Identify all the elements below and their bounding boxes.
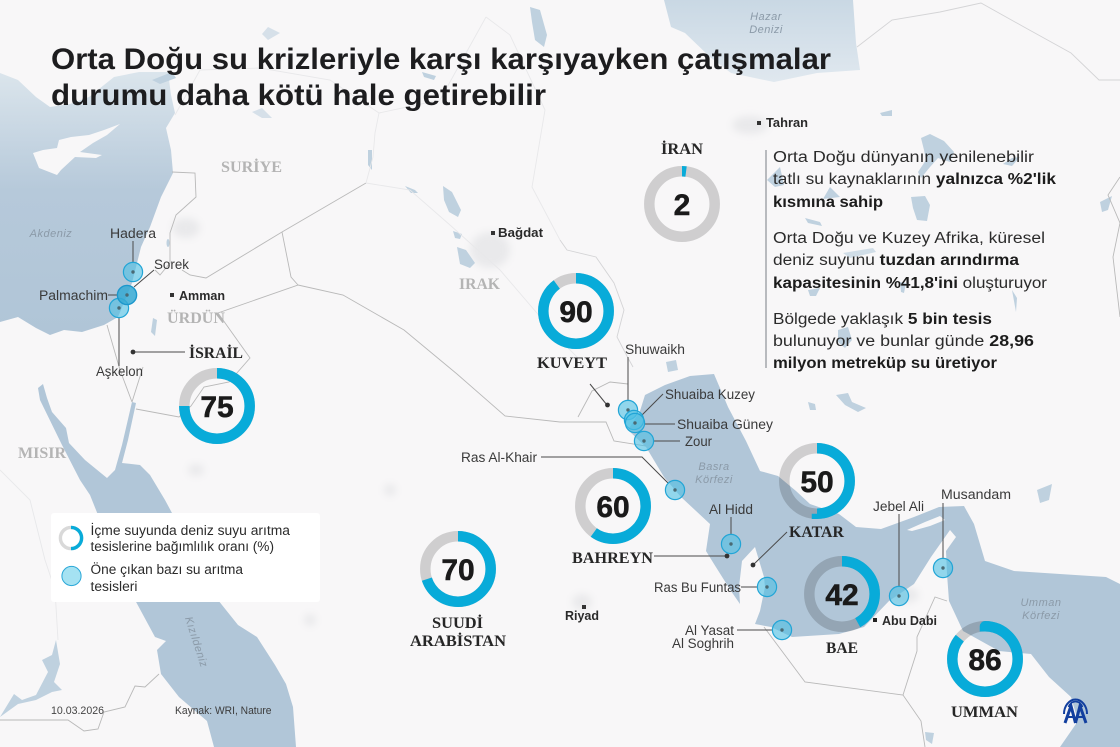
map labels: water bodies: Kızıldeniz — [182, 615, 210, 669]
map labels: countries in grey: SURİYE — [221, 159, 282, 176]
date: 10.03.2026 — [51, 705, 104, 717]
desalination plants: Israel — [39, 226, 189, 379]
text block: key facts: milyon metreküp su üretiyor — [773, 355, 997, 372]
map labels: countries in grey: ÜRDÜN — [167, 310, 225, 327]
desalination plants: Israel: Palmachim — [39, 288, 108, 303]
map labels: water bodies: Akdeniz — [29, 228, 72, 240]
desalination plants: Gulf: Shuwaikh — [625, 342, 685, 357]
map labels: water bodies: Hazar — [750, 11, 783, 23]
desalination plants: Gulf: Al Hidd — [709, 502, 753, 517]
donut: Umman 86: 86 — [968, 644, 1002, 677]
text block: key facts: deniz suyunu tuzdan arındırma — [773, 252, 1019, 269]
icon: AA logo — [1064, 700, 1087, 723]
map labels: countries in grey: IRAK — [459, 276, 500, 293]
desalination plants: Gulf: Shuaiba Kuzey — [665, 387, 755, 402]
legend — [51, 513, 320, 602]
donut: İran 2 — [649, 141, 715, 237]
donut: Bahreyn 60: 60 — [596, 491, 630, 524]
map labels: countries in grey — [18, 159, 500, 462]
country leader lines — [131, 350, 787, 567]
legend: İçme suyunda deniz suyu arıtma — [90, 523, 290, 538]
desalination plants: Gulf: Musandam — [941, 487, 1011, 502]
text block: key facts: Orta Doğu dünyanın yenilenebilir — [773, 149, 1034, 166]
donut: İsrail 75: 75 — [200, 391, 234, 424]
map labels: water bodies: Umman — [1020, 597, 1062, 609]
desalination plants: Gulf: Ras Bu Funtas — [654, 580, 741, 595]
desalination plants: Israel: Aşkelon — [96, 364, 143, 379]
map labels: water bodies: Denizi — [749, 24, 783, 36]
donut: İran 2: İRAN — [661, 141, 703, 158]
text block: key facts: tatlı su kaynaklarının yalnızca %2'lik — [773, 171, 1056, 188]
donut: Suudi Arabistan 70 — [410, 536, 506, 650]
donut: Katar 50: 50 — [800, 466, 834, 499]
desalination plants: Gulf: Al Soghrih — [672, 636, 734, 651]
capital cities: Tahran — [766, 116, 808, 130]
text block: key facts: kapasitesinin %41,8'ini oluşturuyor — [773, 275, 1047, 292]
donut: Katar 50 — [784, 448, 850, 541]
donut: Bahreyn 60 — [572, 473, 653, 567]
donut: Kuveyt 90: 90 — [559, 296, 593, 329]
donut: İsrail 75: İSRAİL — [189, 345, 243, 362]
donut: Suudi Arabistan 70: 70 — [441, 554, 475, 587]
capital cities: Riyad — [565, 609, 599, 623]
donut: Umman 86: UMMAN — [951, 704, 1018, 721]
desalination plants: Gulf: Ras Al-Khair — [461, 450, 538, 465]
desalination plants: Gulf: Zour — [685, 434, 712, 449]
donut: Kuveyt 90 — [537, 278, 609, 372]
text block: key facts — [766, 149, 1056, 372]
desalination plants: Gulf — [461, 342, 1011, 651]
text block: key facts: Bölgede yaklaşık 5 bin tesis — [773, 311, 992, 328]
map labels: water bodies: Körfezi — [695, 474, 733, 486]
legend: tesisleri — [90, 579, 138, 594]
title: durumu daha kötü hale getirebilir — [51, 79, 546, 112]
legend: tesislerine bağımlılık oranı (%) — [90, 539, 274, 554]
desalination plants: Gulf: Shuaiba Güney — [677, 417, 773, 432]
map labels: water bodies: Körfezi — [1022, 610, 1060, 622]
capital cities: Bağdat — [498, 226, 544, 240]
capital cities — [170, 116, 937, 628]
map labels: countries in grey: MISIR — [18, 445, 67, 462]
source: Kaynak: WRI, Nature — [175, 705, 272, 717]
donut: BAE 42: BAE — [826, 640, 858, 657]
capital cities: Amman — [179, 289, 225, 303]
donut: Kuveyt 90: KUVEYT — [537, 355, 608, 372]
text block: key facts: Orta Doğu ve Kuzey Afrika, küresel — [773, 230, 1045, 247]
text block: key facts: bulunuyor ve bunlar günde 28,96 — [773, 333, 1034, 350]
desalination plants: Israel: Hadera — [110, 226, 157, 241]
donut: Suudi Arabistan 70: ARABİSTAN — [410, 633, 506, 650]
desalination plants: Gulf: Jebel Ali — [873, 499, 924, 514]
legend: Öne çıkan bazı su arıtma — [90, 562, 243, 577]
map labels: water bodies: Basra — [698, 461, 730, 473]
donut: Suudi Arabistan 70: SUUDİ — [432, 615, 483, 632]
desalination plants: Israel: Sorek — [154, 257, 189, 272]
capital cities: Abu Dabi — [882, 614, 937, 628]
title — [51, 43, 831, 112]
text block: key facts: kısmına sahip — [773, 194, 883, 211]
desalination plants: Gulf: Al Yasat — [685, 623, 734, 638]
donut: BAE 42: 42 — [825, 579, 859, 612]
donut: İran 2: 2 — [674, 189, 690, 222]
donut: Katar 50: KATAR — [789, 524, 845, 541]
donut: BAE 42 — [809, 561, 875, 657]
donut: Bahreyn 60: BAHREYN — [572, 550, 653, 567]
title: Orta Doğu su krizleriyle karşı karşıyayken çatışmalar — [51, 43, 831, 76]
map: urban texture — [172, 116, 919, 626]
donut: Umman 86 — [951, 626, 1018, 721]
donut: İsrail 75 — [184, 345, 250, 439]
